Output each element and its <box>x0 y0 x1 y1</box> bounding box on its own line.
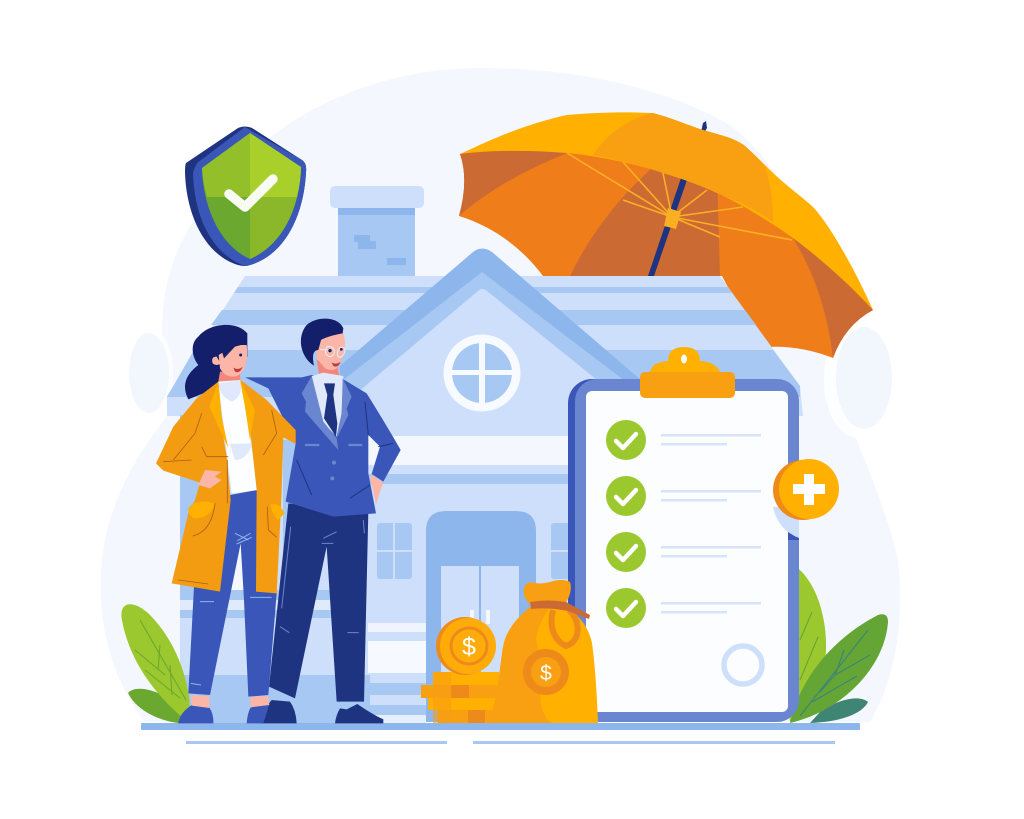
leaves right <box>780 566 888 723</box>
woman shirt <box>218 380 258 493</box>
lower left leaf <box>128 689 190 723</box>
umbrella hub <box>664 208 681 229</box>
plus badge <box>773 459 839 538</box>
checklist item 1 <box>606 420 761 460</box>
woman shoes <box>178 704 269 723</box>
woman hair back <box>185 325 247 399</box>
leaves left <box>121 604 190 723</box>
clipboard clip <box>640 347 735 398</box>
right window <box>551 523 575 579</box>
door <box>426 511 536 722</box>
light green leaf <box>780 566 826 722</box>
bag knot <box>524 580 571 604</box>
man jacket details <box>305 441 362 448</box>
man neck and face <box>317 360 340 380</box>
checklist item 4 <box>606 588 761 628</box>
money bag: $ <box>540 662 552 685</box>
lower siding <box>180 415 370 723</box>
ground line <box>141 723 860 730</box>
man shirt <box>312 373 343 437</box>
clipboard board <box>568 379 793 722</box>
man hair <box>301 319 343 366</box>
gable <box>340 248 700 425</box>
umbrella <box>459 112 873 358</box>
woman <box>156 325 296 723</box>
man jacket <box>245 375 401 517</box>
white band <box>368 436 578 465</box>
woman jeans <box>188 490 277 697</box>
bag coin <box>523 649 569 695</box>
checklist item 3 <box>606 532 761 572</box>
woman face and neck <box>218 372 241 393</box>
man glasses <box>320 346 345 357</box>
stamp ring <box>724 646 762 684</box>
man shoes <box>260 700 383 723</box>
background blob <box>100 68 900 722</box>
checklist item 2 <box>606 476 761 516</box>
umbrella underside <box>459 135 873 358</box>
house <box>167 186 803 723</box>
woman coat <box>156 382 231 592</box>
couple <box>156 319 401 723</box>
clipboard <box>568 347 799 722</box>
man trousers <box>269 503 368 702</box>
umbrella shaft <box>648 121 707 276</box>
shield check mark <box>229 179 273 207</box>
standing coin: $ <box>462 633 476 661</box>
back roof <box>167 276 803 416</box>
ground shadow lines <box>186 741 835 744</box>
umbrella canopy <box>460 112 873 310</box>
man tie <box>324 383 337 437</box>
man hand <box>370 475 383 505</box>
man <box>245 319 401 723</box>
house body <box>180 415 782 722</box>
round attic window <box>444 334 520 412</box>
money bag <box>487 580 598 723</box>
shield icon <box>185 126 306 266</box>
chimney <box>330 186 424 276</box>
woman pockets <box>188 502 284 520</box>
teal leaf <box>810 698 868 723</box>
upper left leaf <box>121 604 190 722</box>
clipboard paper <box>586 391 788 712</box>
coins <box>421 617 499 723</box>
front steps <box>322 623 426 723</box>
bag loop <box>552 610 578 646</box>
coin stack <box>421 672 499 723</box>
man lapels <box>302 376 352 450</box>
umbrella ribs <box>567 153 792 240</box>
woman hand <box>198 470 222 488</box>
left window <box>377 523 412 579</box>
dark green leaf <box>790 614 888 723</box>
